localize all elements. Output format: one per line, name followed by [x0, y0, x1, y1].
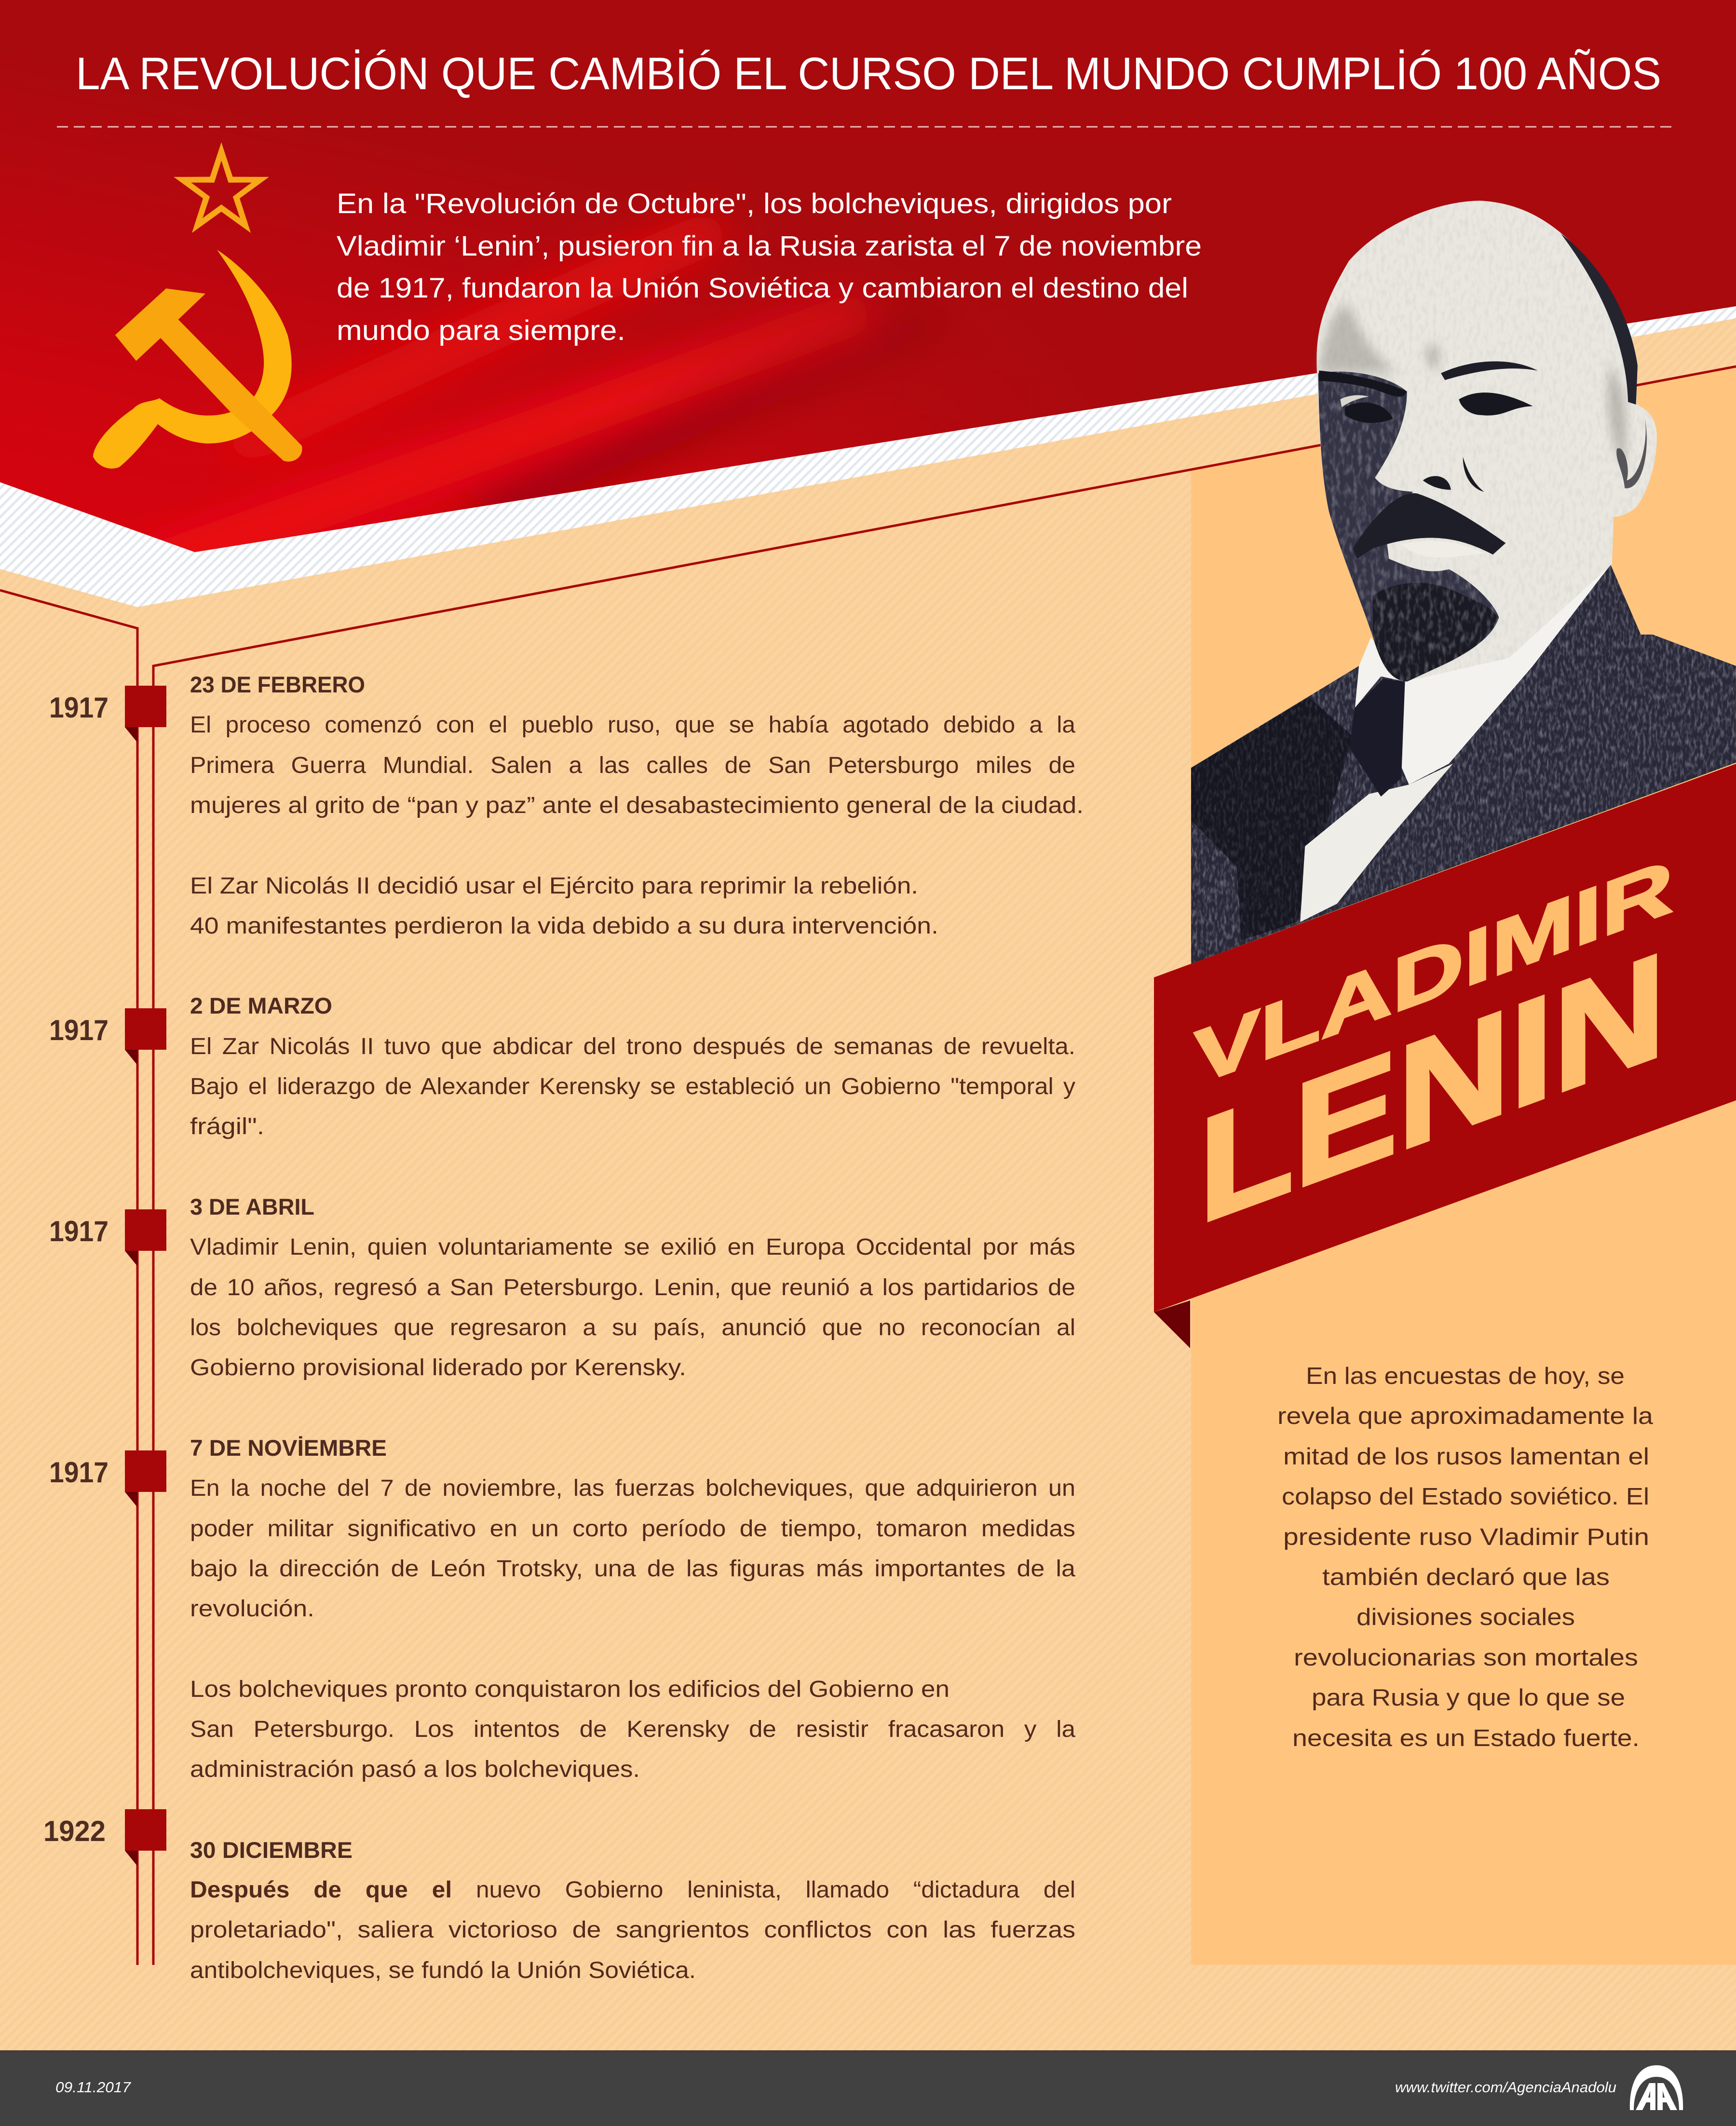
timeline entry: 2 de marzo: 2 DE MARZO	[190, 993, 332, 1018]
timeline rail: left line	[0, 590, 137, 1965]
timeline marker: 1917 March: 1917	[49, 1014, 108, 1046]
timeline rail: right line running into panel	[153, 366, 1736, 1965]
portrait: ear detail	[1616, 418, 1647, 488]
panel: right column background	[1191, 366, 1736, 1965]
intro paragraph: En la "Revolución de Octubre", los bolcheviques, dirigidos por	[337, 188, 1172, 219]
panel text: polls paragraph: revolucionarias son mortales	[1294, 1645, 1638, 1671]
portrait: beard	[1373, 583, 1497, 682]
portrait: left eye and brow	[1319, 371, 1407, 423]
ribbon fold	[1154, 1300, 1190, 1348]
icon: Anadolu Agency logo	[1630, 2065, 1683, 2110]
footer url: www.twitter.com/AgenciaAnadolu	[1395, 2079, 1616, 2096]
intro paragraph	[337, 188, 1202, 346]
icon: hammer	[115, 288, 302, 461]
portrait: tie	[1349, 679, 1405, 797]
intro paragraph: Vladimir ‘Lenin’, pusieron fin a la Rusia zarista el 7 de noviembre	[337, 230, 1202, 262]
timeline marker: 1917 November	[49, 1450, 166, 1507]
portrait: shadow and beard texture	[1317, 366, 1505, 684]
icon: sickle	[93, 250, 292, 469]
timeline entry: 23 de febrero: mujeres al grito de “pan y paz” ante el desabastecimiento general de la ciudad.	[190, 793, 1084, 818]
timeline entry: 3 de abril: los bolcheviques que regresaron a su país, anunció que no reconocían al	[190, 1315, 1075, 1341]
icon: star	[174, 142, 269, 233]
timeline entry: 7 de noviembre: Los bolcheviques pronto conquistaron los edificios del Gobierno en	[190, 1677, 949, 1702]
ribbon text: Vladimir: VLADIMIR	[1194, 842, 1673, 1102]
timeline entry: 7 de noviembre: bajo la dirección de León Trotsky, una de las figuras más importantes de la	[190, 1556, 1075, 1582]
title dashed rule	[57, 126, 1677, 127]
timeline entry: 30 diciembre: 30 DICIEMBRE	[190, 1837, 353, 1863]
timeline entry: 23 de febrero: Primera Guerra Mundial. Salen a las calles de San Petersburgo miles de	[190, 753, 1075, 778]
timeline entry: 3 de abril: Gobierno provisional liderado por Kerensky.	[190, 1355, 686, 1381]
timeline entry: 7 de noviembre: En la noche del 7 de noviembre, las fuerzas bolcheviques, que adquirieron un	[190, 1476, 1075, 1501]
footer bar	[0, 2050, 1736, 2126]
panel text: polls paragraph: mitad de los rusos lamentan el	[1283, 1444, 1649, 1470]
timeline entry: 23 de febrero: El proceso comenzó con el pueblo ruso, que se había agotado debido a la	[190, 712, 1075, 738]
intro paragraph: de 1917, fundaron la Unión Soviética y cambiaron el destino del	[337, 272, 1188, 304]
timeline entry: 23 de febrero: 40 manifestantes perdieron la vida debido a su dura intervención.	[190, 913, 938, 939]
portrait: forehead shading	[1319, 306, 1626, 465]
portrait: suit	[1191, 565, 1736, 964]
portrait: left eye highlight	[1340, 395, 1369, 407]
portrait: dark hair edge	[1561, 234, 1638, 405]
panel text: polls paragraph: colapso del Estado soviético. El	[1282, 1484, 1649, 1510]
timeline marker: 1917 April	[49, 1209, 166, 1266]
timeline marker: 1922: 1922	[43, 1815, 106, 1847]
portrait: suit texture	[1191, 559, 1736, 966]
panel text: polls paragraph: divisiones sociales	[1356, 1604, 1575, 1630]
panel text: polls paragraph: para Rusia y que lo que se	[1312, 1685, 1625, 1711]
timeline entry: 30 diciembre	[190, 1837, 1075, 1983]
timeline entry: 7 de noviembre: poder militar significativo en un corto período de tiempo, tomaron medidas	[190, 1516, 1075, 1542]
timeline marker: 1922	[43, 1809, 166, 1866]
timeline entry: 3 de abril: 3 DE ABRIL	[190, 1194, 314, 1219]
timeline entry: 3 de abril: Vladimir Lenin, quien voluntariamente se exilió en Europa Occidental por más	[190, 1234, 1075, 1260]
portrait: nose	[1423, 457, 1484, 492]
icon: hammer, sickle and star	[93, 142, 302, 469]
intro paragraph: mundo para siempre.	[337, 315, 625, 346]
timeline entry: 7 de noviembre: revolución.	[190, 1596, 314, 1622]
timeline entry: 7 de noviembre: San Petersburgo. Los intentos de Kerensky de resistir fracasaron y la	[190, 1717, 1075, 1742]
timeline marker: 1917 March	[49, 1008, 166, 1065]
timeline entry: 2 de marzo	[190, 993, 1075, 1139]
panel text: polls paragraph: revela que aproximadamente la	[1277, 1403, 1654, 1429]
timeline entry: 30 diciembre: Después de que el nuevo Gobierno leninista, llamado “dictadura del	[190, 1877, 1075, 1903]
panel text: polls paragraph: presidente ruso Vladimir Putin	[1283, 1524, 1649, 1550]
timeline marker: 1917 February	[49, 686, 166, 743]
timeline entry: 3 de abril: de 10 años, regresó a San Petersburgo. Lenin, que reunió a los partidarios de	[190, 1275, 1075, 1300]
title: LA REVOLUCİÓN QUE CAMBİÓ EL CURSO DEL MUNDO CUMPLİÓ 100 AÑOS	[76, 48, 1661, 99]
panel text: polls paragraph	[1277, 1363, 1654, 1751]
timeline entry: 23 de febrero: 23 DE FEBRERO	[190, 672, 365, 697]
portrait: skin texture	[1318, 202, 1654, 677]
portrait: face shadow	[1318, 372, 1499, 682]
panel text: polls paragraph: En las encuestas de hoy, se	[1306, 1363, 1625, 1389]
portrait: head	[1316, 201, 1657, 682]
portrait: collar	[1355, 563, 1612, 785]
timeline entry: 7 de noviembre: 7 DE NOVİEMBRE	[190, 1435, 387, 1461]
portrait: right eye	[1459, 393, 1533, 416]
ribbon: Vladimir Lenin banner	[1154, 764, 1736, 1312]
ribbon text: Lenin: LENIN	[1199, 920, 1666, 1255]
timeline entry: 23 de febrero: El Zar Nicolás II decidió usar el Ejército para reprimir la rebelión.	[190, 873, 918, 899]
timeline entry: 2 de marzo: frágil".	[190, 1114, 264, 1139]
timeline entry: 2 de marzo: Bajo el liderazgo de Alexander Kerensky se estableció un Gobierno "temporal y	[190, 1074, 1075, 1099]
red flag header	[0, 0, 1736, 579]
timeline entry: 30 diciembre: antibolcheviques, se fundó la Unión Soviética.	[190, 1958, 696, 1983]
timeline entry: 7 de noviembre	[190, 1435, 1075, 1782]
portrait: right eyebrow	[1441, 361, 1538, 380]
white striped band under flag	[0, 294, 1736, 607]
panel text: polls paragraph: también declaró que las	[1322, 1564, 1610, 1590]
portrait of Lenin	[1191, 193, 1736, 966]
timeline marker: 1917 February: 1917	[49, 691, 108, 724]
portrait: suit dark lapel shadow	[1191, 697, 1353, 940]
timeline entry: 3 de abril	[190, 1194, 1075, 1381]
timeline marker: 1917 November: 1917	[49, 1456, 108, 1489]
timeline marker: 1917 April: 1917	[49, 1215, 108, 1247]
footer date: 09.11.2017	[55, 2079, 132, 2096]
panel text: polls paragraph: necesita es un Estado fuerte.	[1292, 1725, 1640, 1751]
timeline entry: 30 diciembre: proletariado", saliera victorioso de sangrientos conflictos con las fuerzas	[190, 1917, 1075, 1943]
portrait: shirt front	[1300, 764, 1453, 922]
portrait: lower lip	[1401, 541, 1485, 557]
timeline entry: 23 de febrero	[190, 672, 1084, 939]
timeline entry: 2 de marzo: El Zar Nicolás II tuvo que abdicar del trono después de semanas de revuelta.	[190, 1034, 1075, 1059]
timeline entry: 7 de noviembre: administración pasó a los bolcheviques.	[190, 1757, 640, 1782]
portrait: moustache	[1353, 493, 1505, 559]
